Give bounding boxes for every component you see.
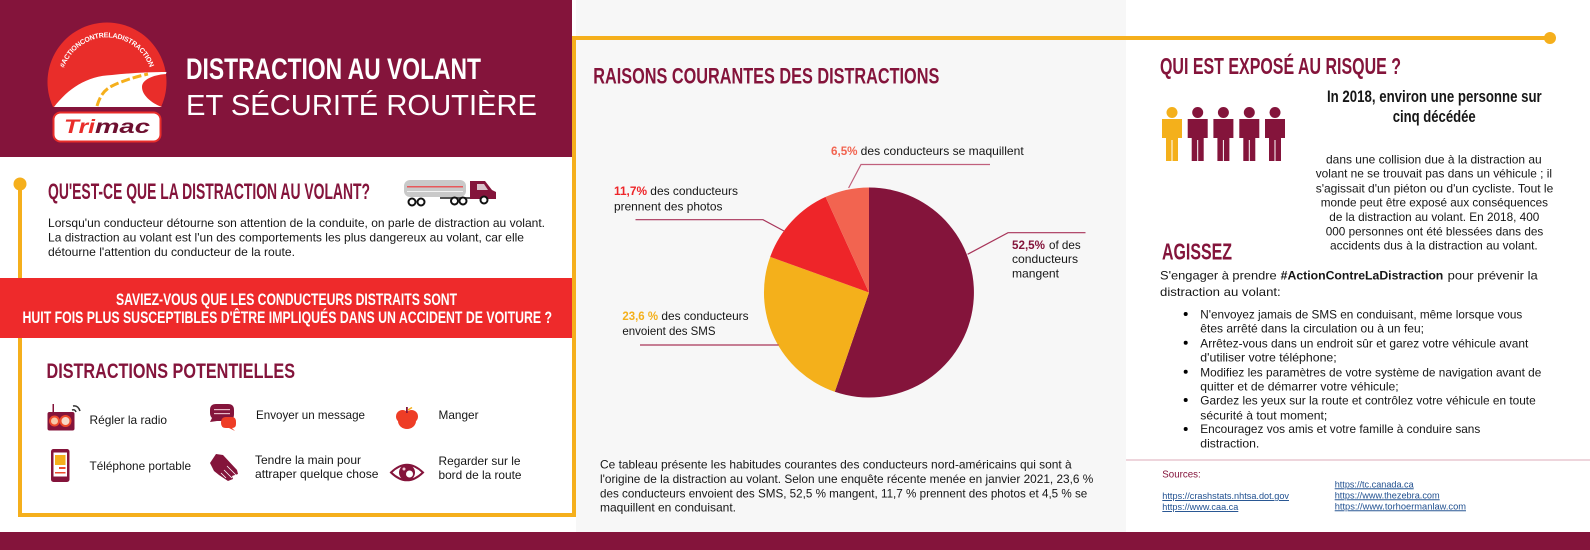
list: safety actions: distraction. [1200,437,1259,451]
list: safety actions: Encouragez vos amis et votre famille à conduire sans [1200,422,1480,436]
links: first column: https://www.caa.ca [1162,502,1239,513]
icon: apple [396,407,418,429]
callout: 23.6 percent SMS: 23,6 % [622,309,658,323]
text block: definition: Lorsqu'un conducteur détourne son attention de la conduite, on parle de distraction au volant. [48,216,545,230]
list: safety actions: Modifiez les paramètres de votre système de navigation avant de [1200,365,1542,379]
label: reach for something: attraper quelque chose [255,467,379,481]
links: second column: https://www.torhoermanlaw.com [1335,501,1466,512]
list: safety actions [1184,307,1542,451]
heading: take action: AGISSEZ [1162,238,1232,264]
text block: risk details: s'agissait d'un piéton ou d'un cycliste. Tout le [1316,181,1554,195]
list: safety actions: Arrêtez-vous dans un endroit sûr et garez votre véhicule avant [1200,336,1529,350]
callout: 23.6 percent SMS: envoient des SMS [622,324,716,338]
links: second column [1335,479,1466,512]
label: look at roadside: bord de la route [438,468,522,482]
text block: one in five: cinq décédée [1393,108,1476,126]
text block: risk details: accidents dus à la distraction au volant. [1330,238,1538,252]
callout: eight times more likely: SAVIEZ-VOUS QUE LES CONDUCTEURS DISTRAITS SONT [116,290,457,309]
text block: risk details: volant ne se trouvait pas dans un véhicule ; il [1316,167,1552,181]
panel: common reasons [593,63,1094,515]
text block: survey description: des conducteurs envoient des SMS, 52,5 % mangent, 11,7 % prennent des photos et 4,5 % se [600,487,1088,501]
links: first column [1162,491,1289,513]
title: ET SÉCURITÉ ROUTIÈRE [186,89,537,122]
label: eat: Manger [438,408,479,422]
icon: message bubbles [210,404,236,431]
text block: pledge: pour prévenir la [1448,268,1538,282]
label: reach for something [255,453,379,481]
icon: reaching hand [210,454,238,481]
links: second column: https://tc.canada.ca [1335,479,1414,490]
text block: risk details: monde peut être exposé aux conséquences [1321,196,1548,210]
links: second column: https://www.thezebra.com [1335,490,1440,501]
text block: definition: La distraction au volant est l'un des comportements les plus dangereux au volant, car elle [48,230,524,244]
text block: risk details: dans une collision due à la distraction au [1326,152,1542,166]
panel: take action [1160,238,1542,451]
list: safety actions: sécurité à tout moment; [1200,408,1327,422]
callout: 6.5 percent make-up: des conducteurs se maquillent [861,144,1024,158]
text block: pledge: #ActionContreLaDistraction [1281,268,1443,282]
links: first column: https://crashstats.nhtsa.dot.gov [1162,491,1289,502]
label: radio: Régler la radio [90,413,167,427]
text block: one in five [1327,88,1542,126]
callout: 11.7 percent photos [614,184,784,231]
logo: Trimac campaign badge: Tri [64,117,96,138]
label: send a message: Envoyer un message [256,408,365,422]
text block: survey description [600,458,1094,515]
callout: 52.5 percent eat: of des [1049,238,1081,252]
text block: survey description: l'origine de la distraction au volant. Selon une enquête récente menée en janvier 2021, 23,6 % [600,472,1094,486]
icon: mobile phone [51,449,70,482]
logo: Trimac campaign badge: mac [95,117,151,138]
icon: timeline dot [14,178,26,190]
text block: survey description: maquillent en conduisant. [600,501,736,515]
list: safety actions: quitter et de démarrer votre véhicule; [1200,379,1399,393]
callout: eight times more likely: HUIT FOIS PLUS SUSCEPTIBLES D'ÊTRE IMPLIQUÉS DANS UN ACCIDENT DE VOITURE ? [22,308,552,327]
text block: one in five: In 2018, environ une personne sur [1327,88,1542,106]
callout: 11.7 percent photos: des conducteurs [650,184,738,198]
callout: 11.7 percent photos: 11,7% [614,184,647,198]
icon: radio [48,404,80,430]
callout: 23.6 percent SMS: des conducteurs [661,309,749,323]
label: reach for something: Tendre la main pour [255,453,361,467]
text block: definition: détourne l'attention du conducteur de la route. [48,245,295,259]
callout: 52.5 percent eat: mangent [1012,267,1060,281]
heading: who is at risk: QUI EST EXPOSÉ AU RISQUE ? [1160,52,1401,79]
header banner [0,0,572,157]
logo: Trimac campaign badge [48,22,166,142]
text block: risk details: de la distraction au volant. En 2018, 400 [1329,210,1540,224]
pie chart [764,188,974,398]
callout: eight times more likely [0,278,572,338]
text block: risk details: 000 personnes ont été blessées dans des [1326,224,1543,238]
icon: five people, one highlighted [1162,107,1285,161]
heading: what is distraction: QU'EST-CE QUE LA DISTRACTION AU VOLANT? [48,179,370,204]
title [186,53,537,122]
icon: timeline end dot [1544,32,1556,44]
panel: potential distractions [46,360,522,482]
list: safety actions: N'envoyez jamais de SMS en conduisant, même lorsque vous [1200,307,1522,321]
callout: 52.5 percent eat: 52,5% [1012,238,1045,252]
heading: potential distractions: DISTRACTIONS POTENTIELLES [46,360,295,383]
label: look at roadside [438,454,522,482]
callout: 52.5 percent eat: conducteurs [1012,252,1078,266]
panel: sources [1162,470,1466,513]
panel: who is at risk [1160,32,1556,252]
list: safety actions: Gardez les yeux sur la route et contrôlez votre véhicule en toute [1200,393,1536,407]
text block: risk details [1316,152,1554,252]
logo: Trimac campaign badge: #ACTIONCONTRELADISTRACTION [60,32,154,68]
heading: sources: Sources: [1162,470,1201,481]
panel: definition [14,178,545,259]
callout: 6.5 percent make-up [831,144,1024,188]
list: safety actions: êtes arrêté dans la circulation ou à un feu; [1200,321,1424,335]
text block: pledge [1160,268,1538,299]
heading: common reasons: RAISONS COURANTES DES DISTRACTIONS [593,63,939,88]
label: look at roadside: Regarder sur le [438,454,521,468]
callout: 52.5 percent eat [968,233,1086,281]
callout: 23.6 percent SMS [622,309,779,345]
icon: eye [391,464,423,480]
text block: pledge: S'engager à prendre [1160,268,1277,282]
text block: definition [48,216,545,259]
text block: pledge: distraction au volant: [1160,285,1281,299]
icon: tanker truck [404,180,496,206]
callout: 11.7 percent photos: prennent des photos [614,200,722,214]
label: mobile phone: Téléphone portable [90,459,191,473]
footer band [0,532,1590,550]
title: DISTRACTION AU VOLANT [186,53,481,86]
text block: survey description: Ce tableau présente les habitudes courantes des conducteurs nord-américains qui sont à [600,458,1072,472]
callout: 6.5 percent make-up: 6,5% [831,144,858,158]
list: safety actions: d'utiliser votre téléphone; [1200,350,1337,364]
